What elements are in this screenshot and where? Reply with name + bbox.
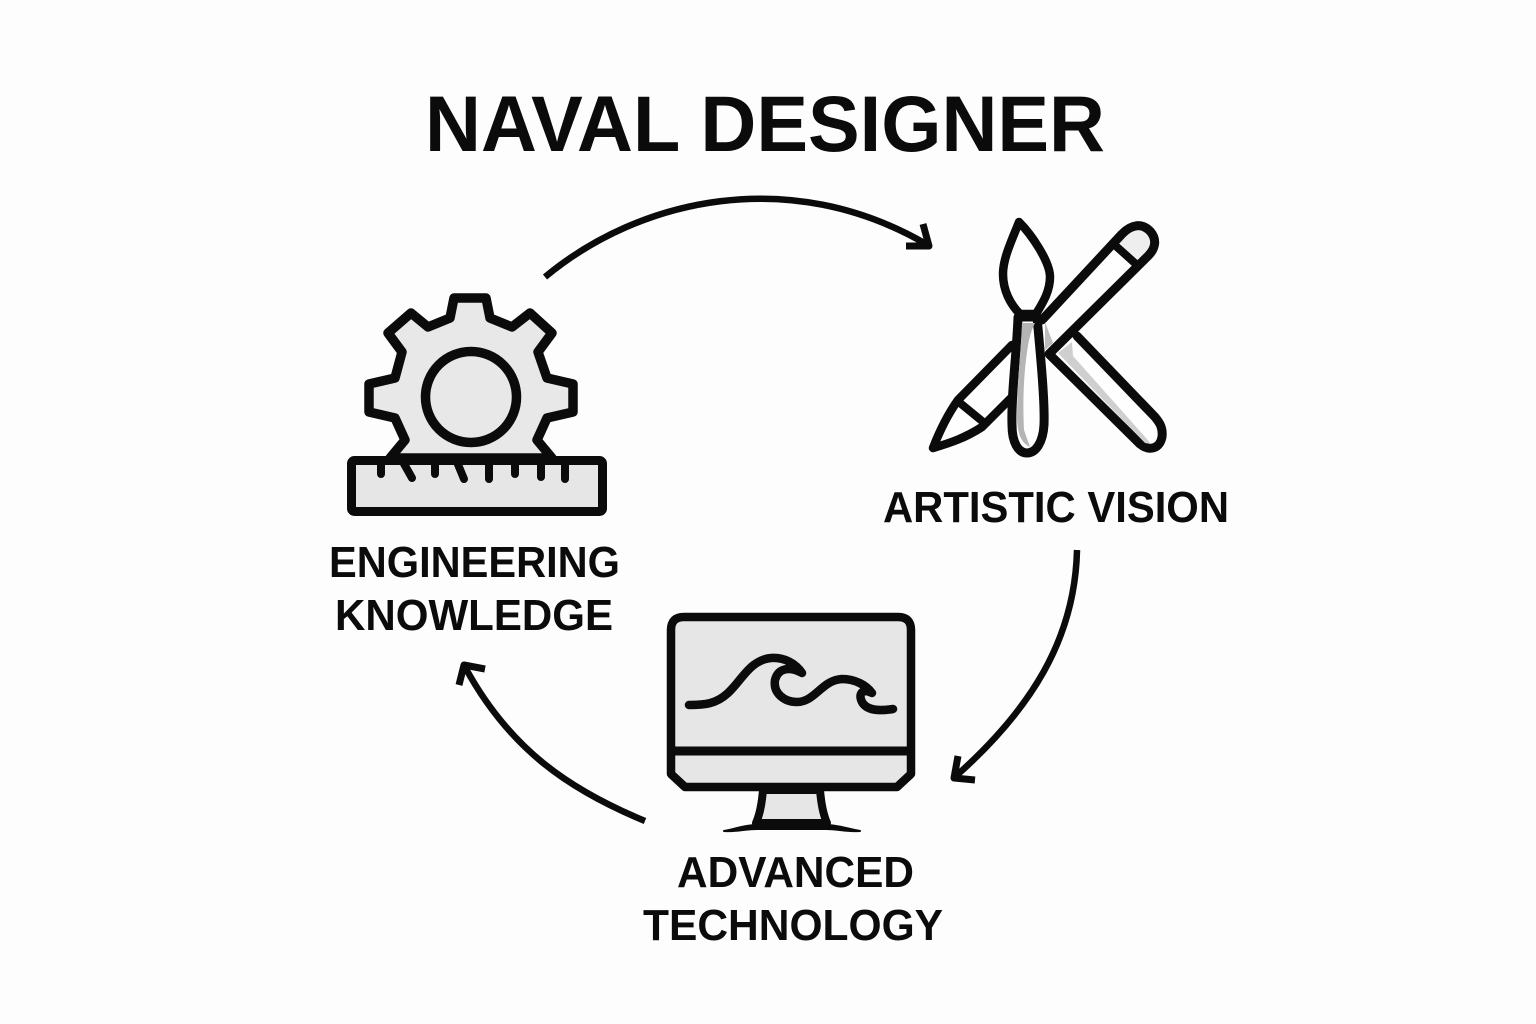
pencil cap line (1117, 247, 1137, 265)
pencil upper shaft and eraser (1042, 226, 1163, 450)
label: advanced technology (643, 849, 943, 950)
brush head (1003, 222, 1050, 314)
wave (689, 658, 893, 710)
gear (369, 298, 573, 458)
pencil lower body (933, 344, 1045, 448)
icon: monitor with wave (671, 617, 911, 831)
pencil ferrule line (960, 403, 982, 421)
arrow: advanced technology to engineering (459, 665, 645, 821)
label: artistic vision: ARTISTIC VISION (883, 484, 1229, 532)
icon: gear on ruler (352, 298, 602, 512)
arrow: engineering to artistic vision (545, 199, 929, 277)
monitor stand (756, 790, 827, 823)
label: engineering knowledge (329, 539, 620, 640)
arrow: artistic vision to advanced technology (954, 550, 1077, 780)
monitor divider (671, 746, 911, 756)
monitor screen (671, 617, 911, 787)
icon: crossed brush and pencil (933, 222, 1163, 453)
label: engineering knowledge: ENGINEERING (329, 539, 620, 587)
monitor base (724, 825, 860, 831)
pencil tip and shaft (933, 345, 1012, 448)
ruler (352, 460, 602, 512)
label: advanced technology: TECHNOLOGY (643, 902, 943, 950)
gear hub (426, 352, 516, 442)
label: advanced technology: ADVANCED (677, 849, 914, 897)
ruler ticks (381, 462, 565, 479)
pencil shading (1058, 342, 1151, 444)
label: engineering knowledge: KNOWLEDGE (335, 592, 613, 640)
title: NAVAL DESIGNER (425, 79, 1105, 168)
brush handle (1012, 317, 1044, 453)
